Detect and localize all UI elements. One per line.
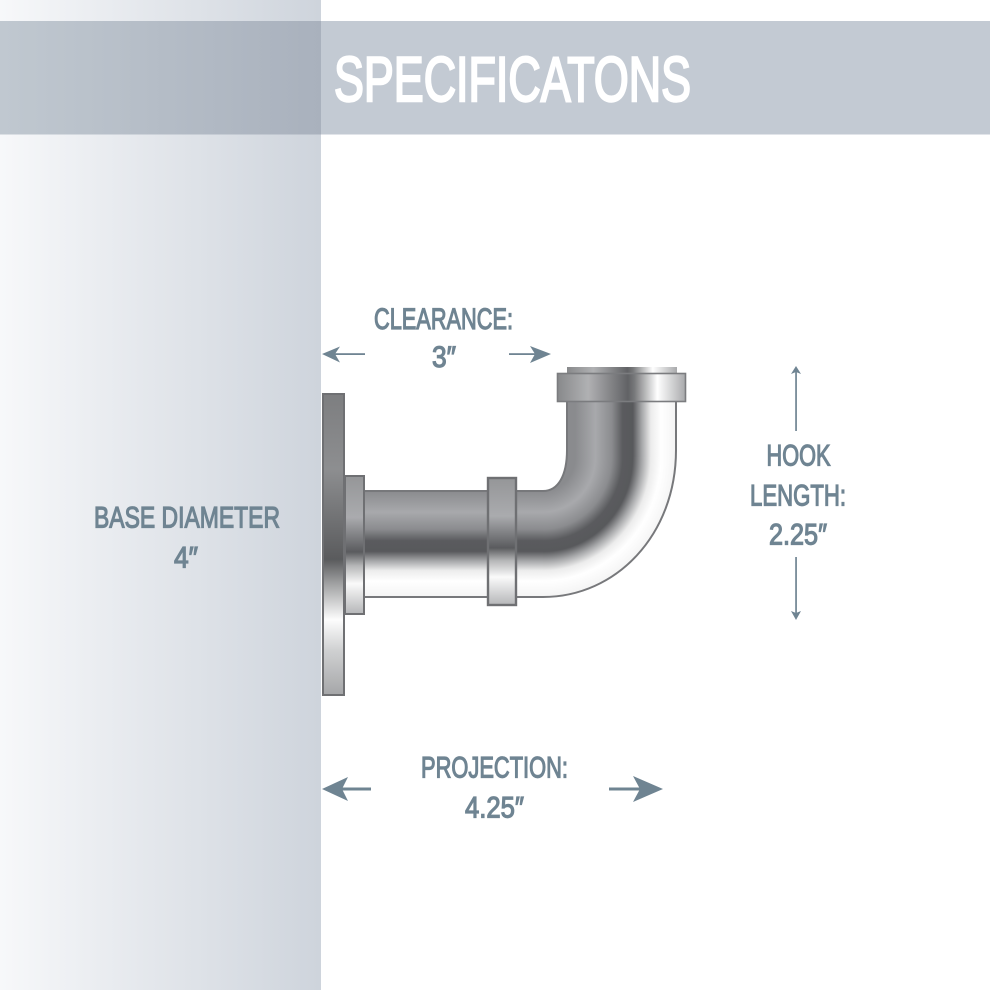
arrow: clearance right: [509, 346, 551, 363]
projection label: PROJECTION:: [421, 752, 568, 784]
base diameter label: 4″: [174, 542, 198, 574]
top flange: [558, 374, 686, 402]
arrow: projection right: [609, 776, 663, 802]
clearance label: 3″: [432, 341, 456, 374]
arrow: projection left: [322, 777, 371, 801]
hook length label: [750, 440, 846, 552]
elbow bend: [543, 457, 676, 597]
pipe ring: [488, 478, 516, 605]
pipe outline: [365, 402, 676, 597]
base collar: [345, 476, 364, 614]
arrow: clearance left: [322, 346, 365, 362]
projection label: 4.25″: [465, 792, 524, 824]
projection label: [421, 752, 568, 824]
hook length label: 2.25″: [769, 518, 827, 552]
base diameter label: [94, 502, 280, 574]
clearance label: CLEARANCE:: [374, 303, 513, 336]
arrow: hook up: [791, 366, 801, 431]
wall: [0, 0, 321, 990]
horizontal pipe: [365, 491, 544, 597]
pipe hook illustration: [323, 367, 686, 695]
vertical pipe: [567, 402, 676, 458]
hook length label: LENGTH:: [750, 480, 846, 512]
header band: [0, 21, 990, 134]
arrow: hook down: [791, 557, 801, 620]
top lip: [567, 367, 677, 373]
title: SPECIFICATONS: [334, 45, 691, 115]
hook length label: HOOK: [766, 440, 831, 472]
clearance label: [374, 303, 513, 374]
base plate: [323, 394, 344, 695]
base diameter label: BASE DIAMETER: [94, 502, 280, 534]
